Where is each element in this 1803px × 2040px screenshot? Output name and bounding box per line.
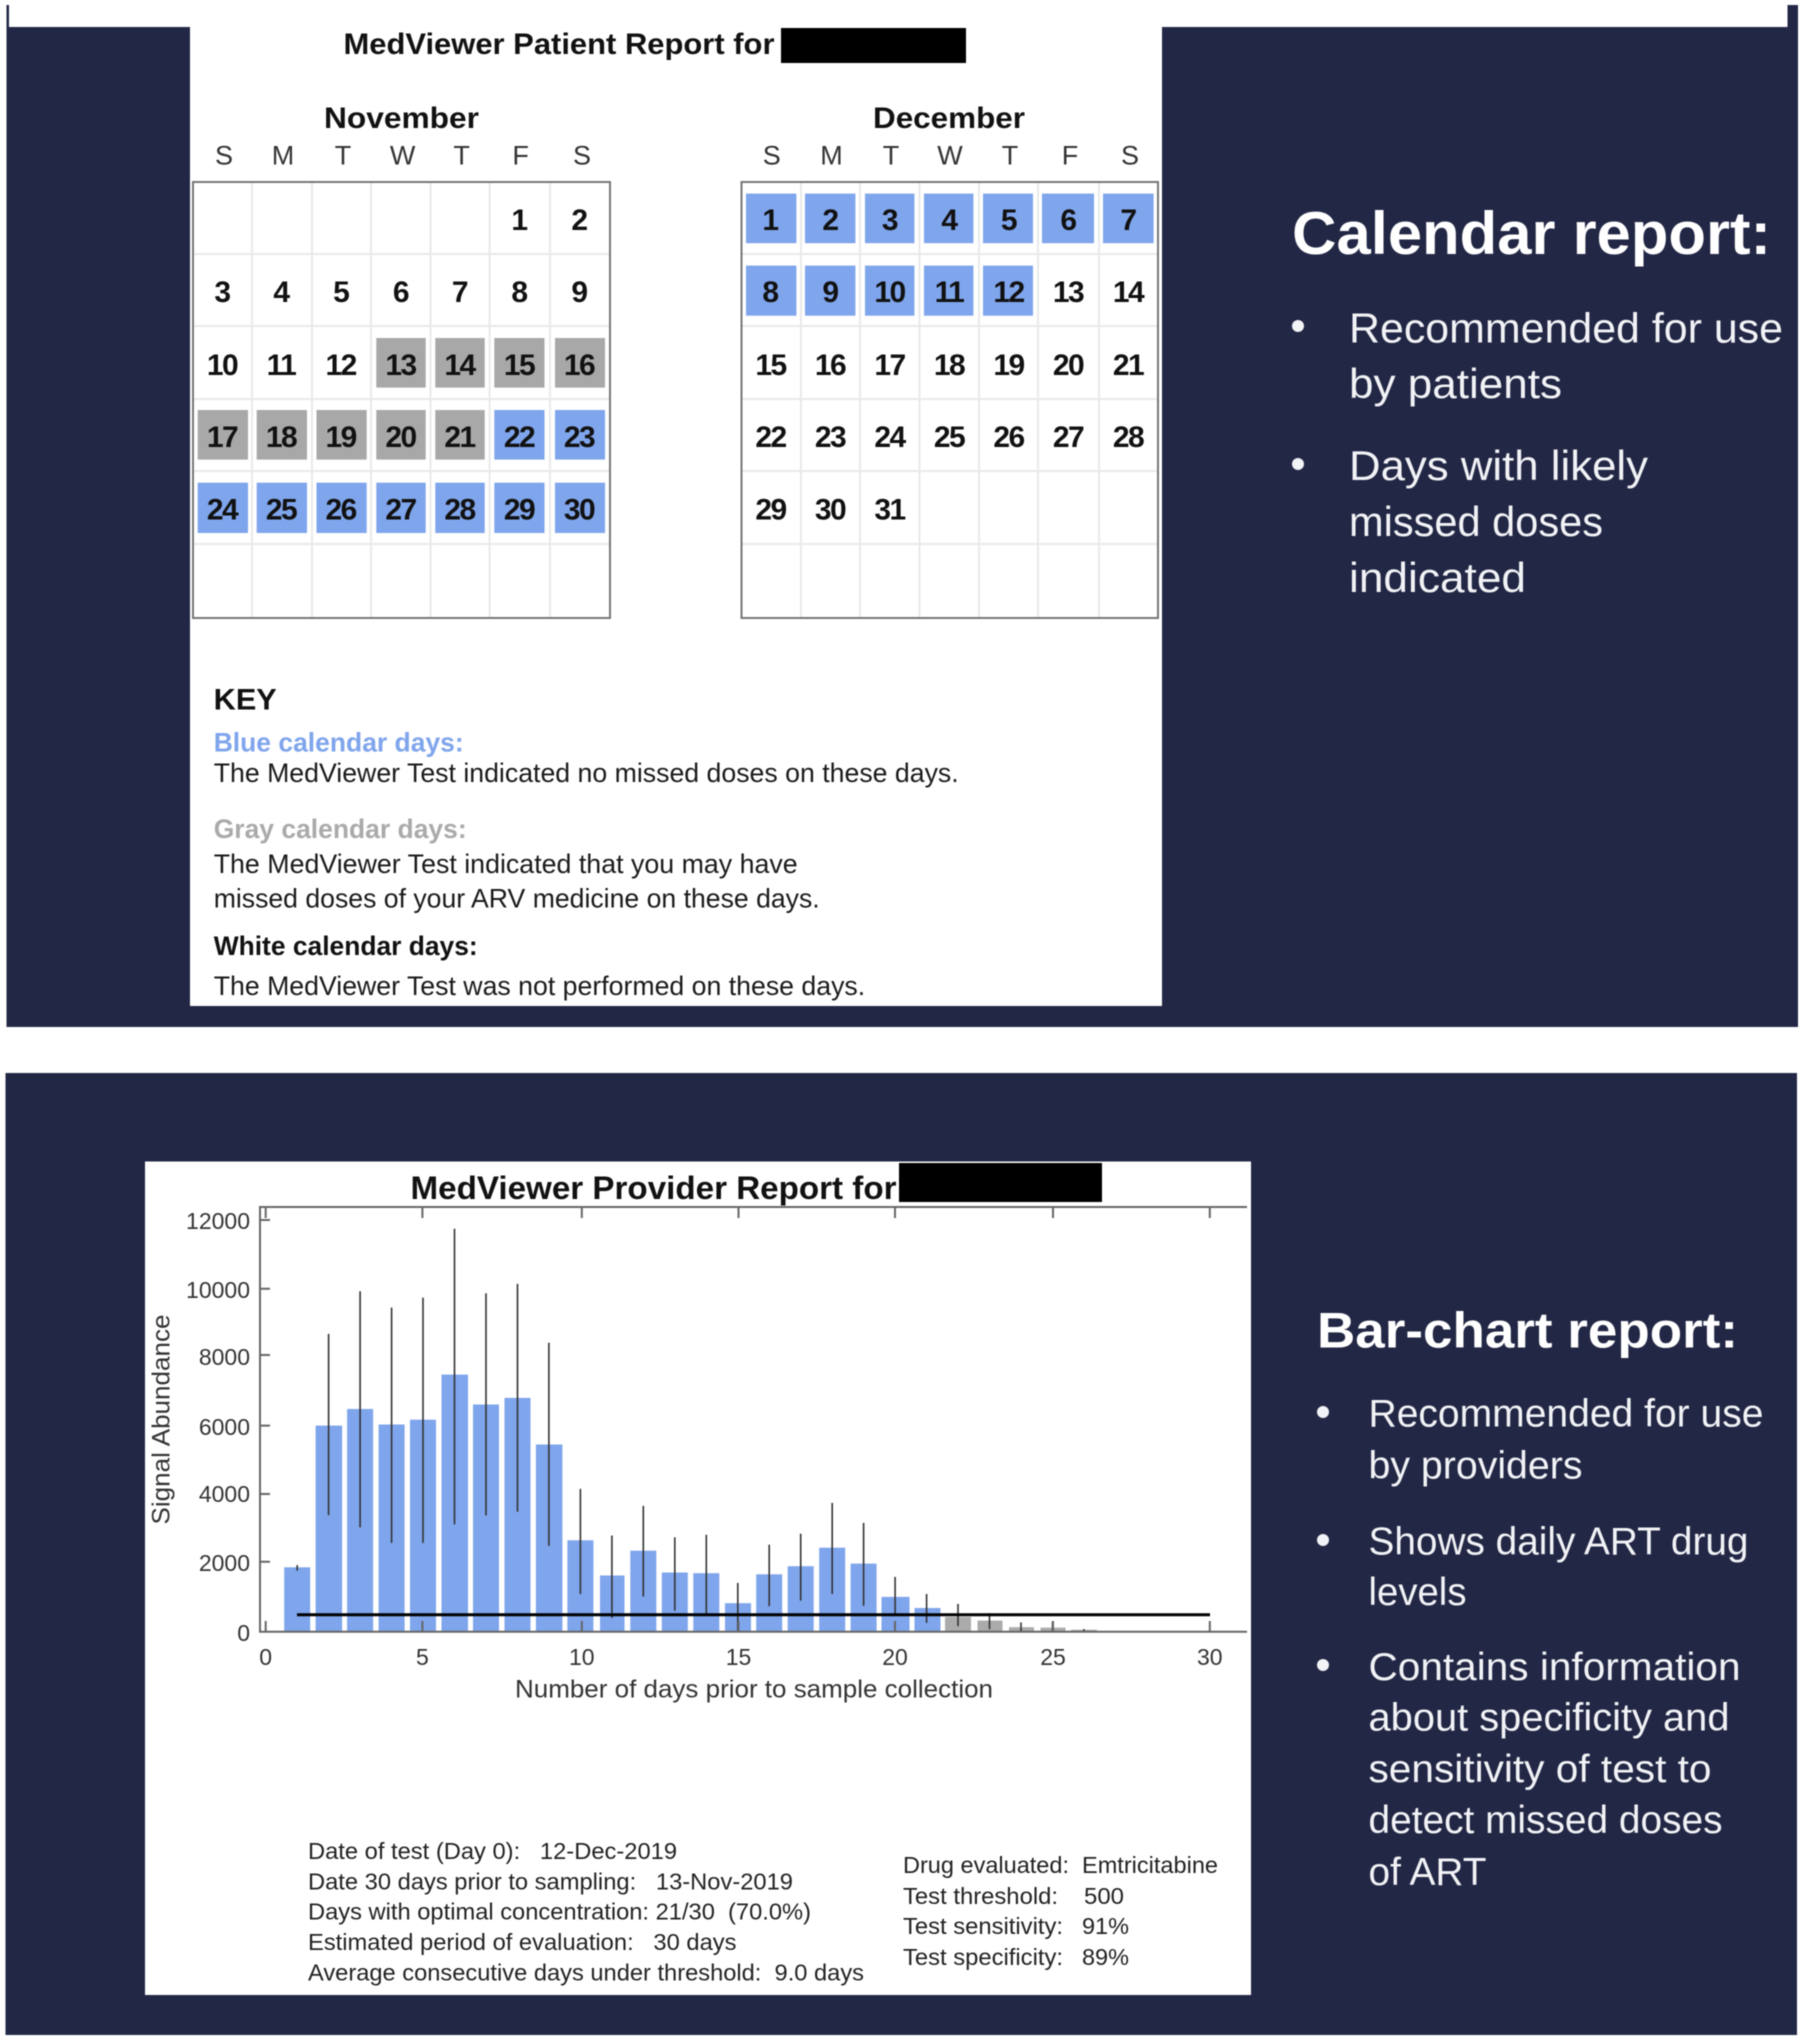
calendar: November: 29	[504, 494, 535, 526]
calendar: December: 21	[1113, 349, 1144, 382]
x axis tick labels	[259, 1644, 1223, 1670]
key: KEY	[214, 683, 277, 716]
bullet list: bar-chart report: by providers	[1368, 1444, 1582, 1488]
calendar: December: 22	[755, 421, 786, 454]
calendar: November: 14	[444, 349, 476, 382]
test summary text: Average consecutive days under threshold: 9.0 days	[308, 1960, 864, 1986]
sheet title: MedViewer Patient Report for	[344, 28, 775, 61]
bullet list: bar-chart report: sensitivity of test to	[1368, 1748, 1712, 1791]
test characteristics text: Drug evaluated:	[903, 1852, 1069, 1878]
calendar: December: 20	[1053, 349, 1084, 382]
calendar: November: M	[272, 140, 294, 170]
y axis tick labels: 2000	[199, 1550, 250, 1576]
calendar: December: 15	[755, 349, 786, 382]
calendar: November: F	[512, 140, 529, 170]
test characteristics text: 500	[1084, 1883, 1124, 1909]
key: The MedViewer Test indicated that you may have	[214, 849, 798, 879]
calendar: November: 22	[504, 421, 535, 454]
y axis tick labels: 12000	[186, 1208, 250, 1234]
x axis title: Number of days prior to sample collection	[515, 1676, 993, 1704]
calendar: November: 2	[571, 204, 587, 237]
test characteristics text: Test specificity:	[903, 1944, 1063, 1970]
calendar: December: 16	[815, 349, 846, 382]
bullet list: bar-chart report	[1317, 1392, 1764, 1894]
calendar: November: S	[573, 140, 591, 170]
calendar: November: 24	[207, 494, 239, 526]
calendar: December: M	[820, 140, 843, 170]
test characteristics text: 91%	[1082, 1913, 1129, 1939]
bullet list: bar-chart report: Contains information	[1368, 1646, 1740, 1689]
test characteristics text: Test threshold:	[903, 1883, 1058, 1909]
calendar: December: T	[1002, 140, 1018, 170]
bars above threshold	[284, 1375, 940, 1632]
calendar: November: 30	[564, 494, 595, 526]
bar chart	[148, 1207, 1247, 1704]
panel: calendar report	[6, 0, 1798, 1027]
key: Blue calendar days:	[214, 728, 464, 758]
test characteristics text	[903, 1852, 1218, 1970]
test characteristics text: Emtricitabine	[1082, 1852, 1218, 1878]
calendar: November	[193, 102, 610, 618]
sheet title: MedViewer Provider Report for	[410, 1170, 896, 1206]
calendar: December: 9	[822, 276, 838, 309]
calendar: November: 27	[385, 494, 416, 526]
calendar: November: W	[390, 140, 416, 170]
calendar: December: 14	[1113, 276, 1145, 309]
calendar: December: 3	[882, 204, 898, 237]
y axis tick labels	[186, 1208, 250, 1646]
calendar: December: December	[873, 102, 1025, 135]
bullet list: bar-chart report: of ART	[1368, 1851, 1486, 1894]
test summary text	[308, 1838, 864, 1986]
calendar: November: 4	[273, 276, 290, 309]
heading: bar-chart report: Bar-chart report:	[1317, 1302, 1738, 1358]
calendar: November: 25	[266, 494, 297, 526]
calendar: November: 11	[267, 349, 296, 382]
bullet list: bar-chart report: about specificity and	[1368, 1696, 1730, 1740]
calendar: November: 26	[326, 494, 357, 526]
y axis tick labels: 6000	[199, 1414, 250, 1440]
calendar: November: 15	[504, 349, 535, 382]
calendar: November: 16	[564, 349, 595, 382]
calendar: November: 21	[444, 421, 475, 454]
threshold line	[297, 1613, 1210, 1616]
calendar: November: 10	[207, 349, 238, 382]
heading: calendar report: Calendar report:	[1292, 200, 1771, 267]
calendar: December: 11	[935, 276, 964, 309]
key: The MedViewer Test was not performed on these days.	[214, 971, 865, 1001]
calendar: December: 19	[993, 349, 1024, 382]
calendar: November: 19	[326, 421, 357, 454]
test characteristics text: Test sensitivity:	[903, 1913, 1063, 1939]
patient report sheet	[190, 0, 1162, 1006]
bullet list: calendar report: Recommended for use	[1349, 304, 1783, 352]
calendar: November: 12	[326, 349, 357, 382]
calendar: December: 18	[934, 349, 965, 382]
bullet list: bar-chart report: Shows daily ART drug	[1368, 1520, 1748, 1563]
error bars	[297, 1229, 1084, 1632]
y axis tick labels: 10000	[186, 1277, 250, 1303]
y axis tick labels: 8000	[199, 1344, 250, 1370]
bullet list: calendar report	[1292, 304, 1783, 601]
calendar: December: 5	[1001, 204, 1017, 237]
calendar: December: 7	[1120, 204, 1136, 237]
calendar: December: 12	[993, 276, 1024, 309]
key: White calendar days:	[214, 931, 478, 961]
calendar: December: 4	[941, 204, 958, 237]
bullet list: bar-chart report: levels	[1368, 1571, 1466, 1614]
redaction block	[899, 1163, 1102, 1202]
x axis tick labels: 5	[416, 1644, 429, 1670]
calendar: December: 10	[874, 276, 905, 309]
calendar: November: 13	[385, 349, 416, 382]
calendar: December: 2	[822, 204, 838, 237]
calendar: December: 8	[762, 276, 778, 309]
calendar: December: 25	[934, 421, 965, 454]
key: missed doses of your ARV medicine on these days.	[214, 884, 820, 914]
x axis tick labels: 0	[259, 1644, 272, 1670]
provider report sheet	[145, 1162, 1251, 1995]
calendar: November: 20	[385, 421, 416, 454]
test summary text: Days with optimal concentration: 21/30 (70.0%)	[308, 1898, 811, 1924]
calendar: November: 1	[511, 204, 527, 237]
calendar: December: T	[883, 140, 899, 170]
test summary text: Date 30 days prior to sampling: 13-Nov-2019	[308, 1868, 793, 1894]
key	[214, 683, 959, 1001]
calendar: November: 23	[564, 421, 595, 454]
bullet list: bar-chart report: detect missed doses	[1368, 1799, 1722, 1842]
bullet list: bar-chart report: Recommended for use	[1368, 1392, 1764, 1436]
panel: bar-chart report	[6, 1073, 1797, 2035]
axes and ticks	[260, 1207, 1247, 1632]
calendar: November: 6	[393, 276, 409, 309]
calendar: December: 31	[874, 494, 905, 526]
calendar: December: 6	[1060, 204, 1076, 237]
x axis tick labels: 25	[1040, 1644, 1066, 1670]
calendar: December: S	[763, 140, 781, 170]
test summary text: Estimated period of evaluation: 30 days	[308, 1929, 736, 1955]
calendar: December: S	[1121, 140, 1139, 170]
x axis tick labels: 10	[569, 1644, 595, 1670]
x axis tick labels: 15	[726, 1644, 751, 1670]
calendar: December: 28	[1113, 421, 1144, 454]
calendar: November: 7	[452, 276, 468, 309]
calendar: November: 9	[571, 276, 587, 309]
bars below threshold	[945, 1617, 1097, 1632]
calendar: November: 28	[444, 494, 475, 526]
key: The MedViewer Test indicated no missed doses on these days.	[214, 758, 959, 788]
calendar: November: 3	[214, 276, 230, 309]
y axis tick labels: 4000	[199, 1481, 250, 1507]
bullet list: calendar report: by patients	[1349, 360, 1562, 407]
calendar: December: 13	[1053, 276, 1084, 309]
bullet list: calendar report: Days with likely	[1349, 442, 1648, 489]
calendar: December: 27	[1053, 421, 1084, 454]
calendar: November: 8	[511, 276, 527, 309]
test summary text: Date of test (Day 0): 12-Dec-2019	[308, 1838, 677, 1864]
calendar: November: 17	[207, 421, 238, 454]
calendar: December: 1	[762, 204, 778, 237]
calendar: December: 26	[993, 421, 1024, 454]
key: Gray calendar days:	[214, 814, 467, 844]
calendar: December: 29	[755, 494, 786, 526]
calendar: November: 5	[333, 276, 349, 309]
calendar: November: T	[335, 140, 351, 170]
y axis tick labels: 0	[237, 1620, 250, 1646]
bullet list: calendar report: indicated	[1349, 554, 1526, 601]
calendar: December: 23	[815, 421, 846, 454]
x axis tick labels: 30	[1197, 1644, 1223, 1670]
calendar: December: 30	[815, 494, 846, 526]
calendar: December	[742, 102, 1158, 618]
bullet list: calendar report: missed doses	[1349, 498, 1603, 545]
test characteristics text: 89%	[1082, 1944, 1129, 1970]
redaction block	[781, 28, 966, 63]
x axis tick labels: 20	[882, 1644, 908, 1670]
calendar: November: 18	[266, 421, 297, 454]
calendar: November: S	[215, 140, 233, 170]
calendar: November: T	[453, 140, 470, 170]
calendar: December: 17	[874, 349, 905, 382]
y axis title: Signal Abundance	[148, 1314, 176, 1524]
calendar: December: F	[1062, 140, 1078, 170]
calendar: December: W	[937, 140, 963, 170]
calendar: November: November	[324, 102, 479, 135]
calendar: December: 24	[874, 421, 906, 454]
